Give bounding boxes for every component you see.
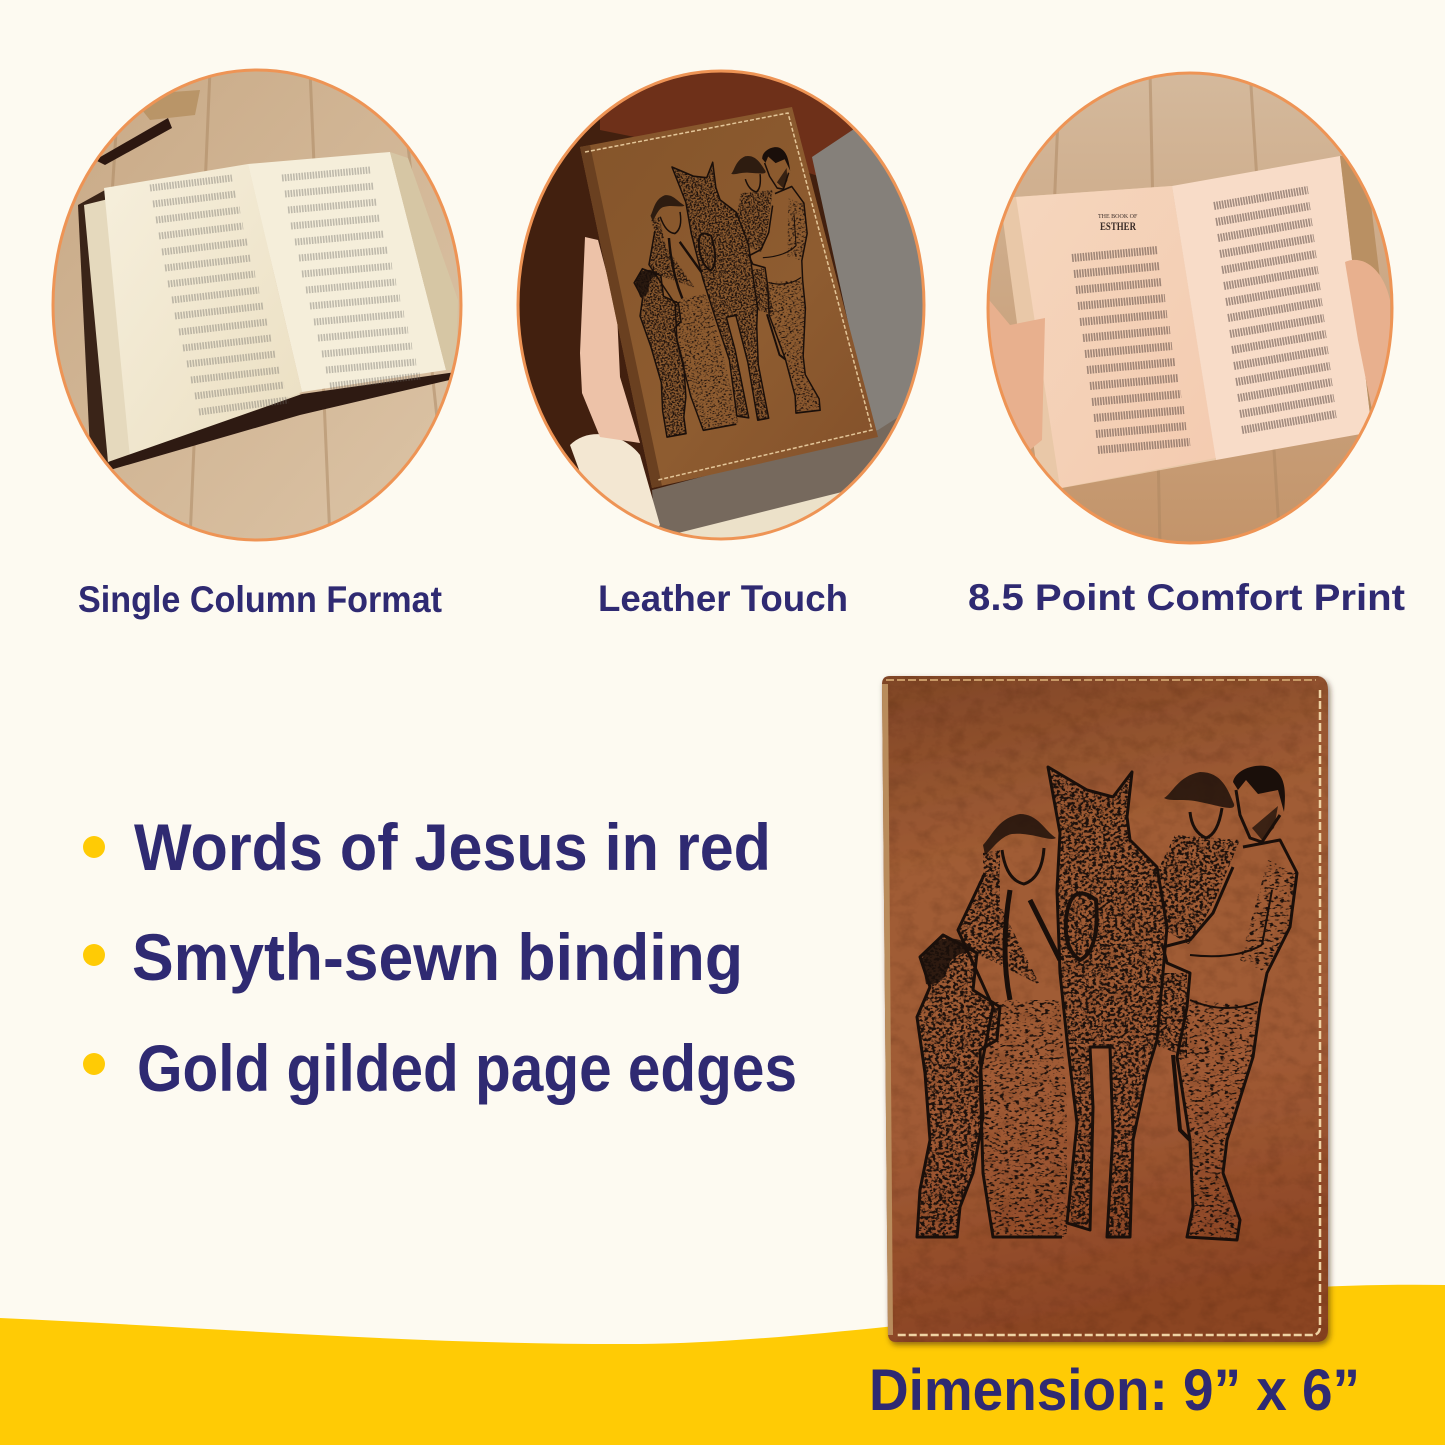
bullet icon 2: [83, 944, 105, 966]
bullet text: words of Jesus in red: Words of Jesus in red: [134, 810, 771, 884]
engraved family portrait: [917, 766, 1297, 1240]
photo: hands holding open bible, comfort print: ESTHER: [1100, 219, 1136, 233]
photo: hands holding open bible, comfort print: [985, 70, 1400, 545]
bullet icon 1: [83, 836, 105, 858]
bullet text: gold gilded page edges: Gold gilded page edges: [137, 1031, 797, 1105]
bullet icon 3: [83, 1053, 105, 1075]
bullet text: smyth-sewn binding: Smyth-sewn binding: [132, 920, 743, 994]
engraved family on small book: [633, 147, 821, 438]
caption: 8.5 point comfort print: 8.5 Point Comfort Print: [968, 577, 1405, 618]
photo: open bible on wood, single column: [53, 70, 461, 540]
column text lines left: [150, 178, 288, 412]
photo: hands holding open bible, comfort print: THE BOOK OF: [1098, 214, 1138, 220]
bullet list: [83, 810, 797, 1105]
yellow wave footer: [0, 1285, 1445, 1445]
dimension label: Dimension: 9” x 6”: [869, 1358, 1360, 1423]
leather bible cover with engraved family: [882, 676, 1328, 1342]
column text lines right: [282, 170, 420, 386]
caption: leather touch: Leather Touch: [598, 578, 848, 619]
photo: hand holding engraved leather bible: [518, 70, 925, 545]
caption: single column format: Single Column Format: [78, 579, 442, 620]
